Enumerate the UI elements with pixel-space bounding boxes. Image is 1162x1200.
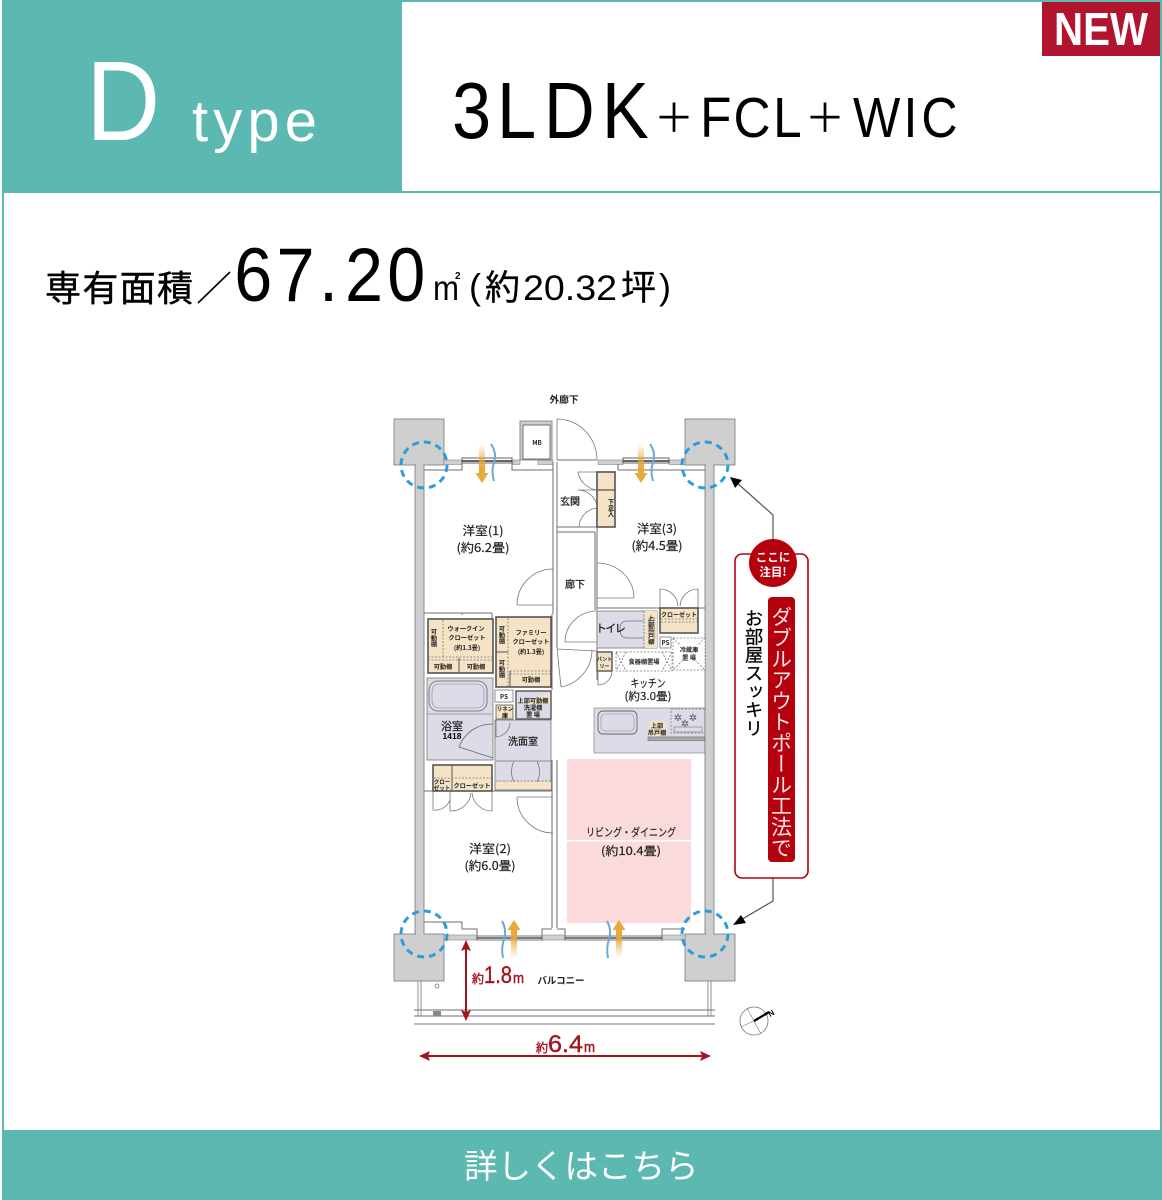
kitchen counter: ✲ [674,713,682,724]
family closet: 可動棚 [522,675,540,684]
doors [433,419,698,833]
footer link bar [2,1130,1162,1200]
plan name heading: ＋ [805,86,845,144]
cupboard space [616,652,672,671]
pantry [597,652,612,685]
outer walls [415,464,714,935]
walk-in closet: 可動棚 [467,662,485,671]
family closet [496,617,551,687]
attention badge: ここに [756,549,790,565]
toilet: 上部吊戸棚 [646,615,656,646]
label: western room 2: 洋室(2) [469,840,511,857]
washer space [516,691,551,719]
cupboard space: 食器棚置場 [629,657,659,666]
family closet: (約1.3畳) [518,647,544,656]
closet room 3 [660,608,698,633]
family closet: 可動棚 [498,660,506,680]
wave: south 2 [607,921,610,958]
callout box [735,554,808,878]
linen cupboard: 庫 [502,711,508,720]
living dining highlight [567,759,691,923]
balcony: バルコニー [538,973,584,987]
vertical caption: お部屋スッキリ [741,609,767,737]
label: living dining: リビング・ダイニング [586,824,676,840]
NEW badge: NEW [1054,3,1149,55]
callout: double outpole [730,477,808,925]
wave: south 1 [502,921,505,958]
dimension: balcony width: 約 [536,1039,548,1056]
plan name heading: ＋ [654,86,694,144]
attention badge [749,539,797,587]
dimension: balcony depth [461,940,524,1021]
arrow: south 1 [508,920,520,958]
walk-in closet: ウォークイン [447,624,485,633]
type letter: D [86,37,160,164]
label: kitchen size: (約3.0畳) [624,688,672,704]
room labels [456,392,682,874]
plan name heading: FCL [700,87,802,150]
label: western room 3 size: (約4.5畳) [632,537,682,554]
family closet: ファミリー [516,628,546,637]
dimension: balcony depth: m [513,970,524,987]
closets room 2: クロー [434,778,450,786]
area heading: 67.20 [234,234,425,318]
compass [740,1007,776,1035]
pipe space wash [495,690,513,702]
arrow: north 2 [634,444,648,483]
leader lines [730,477,773,925]
pipe space wash: PS [500,692,508,701]
columns [394,419,735,981]
bathroom: 浴室 [441,718,463,734]
area heading: 専有面積 [45,260,193,312]
compass: N [766,1008,776,1019]
area heading [45,234,671,318]
walk-in closet: (約1.3畳) [454,643,480,652]
family closet: クローゼット [512,637,550,646]
label: kitchen: キッチン [630,675,666,691]
refrigerator space: 置 場 [682,653,696,662]
south wall and windows [444,935,685,940]
bathroom: 1418 [443,731,462,741]
plan name heading [452,66,958,155]
north wall and windows [424,458,705,470]
arrow: south 2 [612,920,626,958]
pantry: リー [599,663,610,670]
pipe space kitchen: PS [662,638,670,647]
dimension: balcony width: 6.4 [548,1031,583,1058]
walk-in closet [428,619,493,673]
washer space: 置 場 [526,710,540,719]
pantry: パント [597,656,612,663]
washroom [495,720,551,790]
plan name heading: 3LDK [452,66,649,155]
kitchen counter [594,708,705,753]
area heading: 坪 [621,260,656,311]
dimension: balcony width: m [584,1039,595,1056]
washroom: 洗面室 [508,733,538,748]
walk-in closet: クローゼット [448,633,486,642]
red vertical headline: ダブルアウトポール工法で [766,606,796,858]
dimension: balcony depth: 約 [472,970,484,987]
linen cupboard: リネン [497,705,514,713]
plan name heading: WIC [853,86,958,150]
arrow: north 1 [476,444,488,483]
linen cupboard [496,705,514,720]
wave: north 1 [491,444,495,481]
toilet: トイレ [596,620,625,636]
label: entrance: 玄関 [560,493,580,508]
kitchen counter: ✲ [681,719,689,730]
ventilation arrows [476,444,654,958]
walk-in closet: 可動棚 [430,629,438,649]
label: western room 3: 洋室(3) [637,520,677,537]
label: hall: 廊下 [565,576,585,591]
area heading: 約 [485,260,520,311]
kitchen counter: 上部 [651,721,664,730]
refrigerator space: 冷蔵庫 [680,645,698,654]
label: western room 1: 洋室(1) [462,522,504,539]
label: western room 1 size: (約6.2畳) [456,539,510,556]
closets room 2: クローゼット [453,781,491,790]
area heading: ( [469,266,481,307]
interior walls [424,462,705,936]
closets room 2: ゼット [434,784,450,792]
kitchen counter: ✲ [689,713,697,724]
refrigerator space [673,638,705,670]
dimension: balcony depth: 1.8 [484,962,512,989]
meter box: MB [532,438,542,447]
attention badge: 注目! [759,564,787,580]
label: corridor outside: 外廊下 [550,392,579,406]
label: western room 2 size: (約6.0畳) [464,857,516,874]
family closet: 可動棚 [498,626,506,646]
wave: north 2 [650,444,654,481]
washer space: 洗濯機 [524,703,543,712]
pipe space kitchen [660,637,671,648]
area heading: 2 [455,271,461,282]
shoe cabinet [597,472,616,527]
closet room 3: クローゼット [661,610,697,619]
column highlight rings [401,442,728,957]
meter box [520,421,552,460]
toilet [596,611,657,648]
area heading: m [433,269,459,308]
kitchen counter: 吊戸棚 [648,728,666,737]
dimension: balcony width [419,1031,711,1061]
label: living dining size: (約10.4畳) [601,843,661,859]
closets room 2 [433,765,492,792]
balcony [414,973,715,1024]
washer space: 上部可動棚 [518,696,548,705]
walk-in closet: 可動棚 [434,662,452,671]
bathroom [427,678,493,760]
area heading: 20.32 [523,269,617,308]
type word: type [192,89,317,154]
shoe cabinet: 下足入 [606,499,616,519]
footer link bar: 詳しくはこちら [464,1139,698,1188]
area heading: ) [659,266,671,307]
header panel: D type [2,0,402,193]
floor plan [394,392,776,1061]
